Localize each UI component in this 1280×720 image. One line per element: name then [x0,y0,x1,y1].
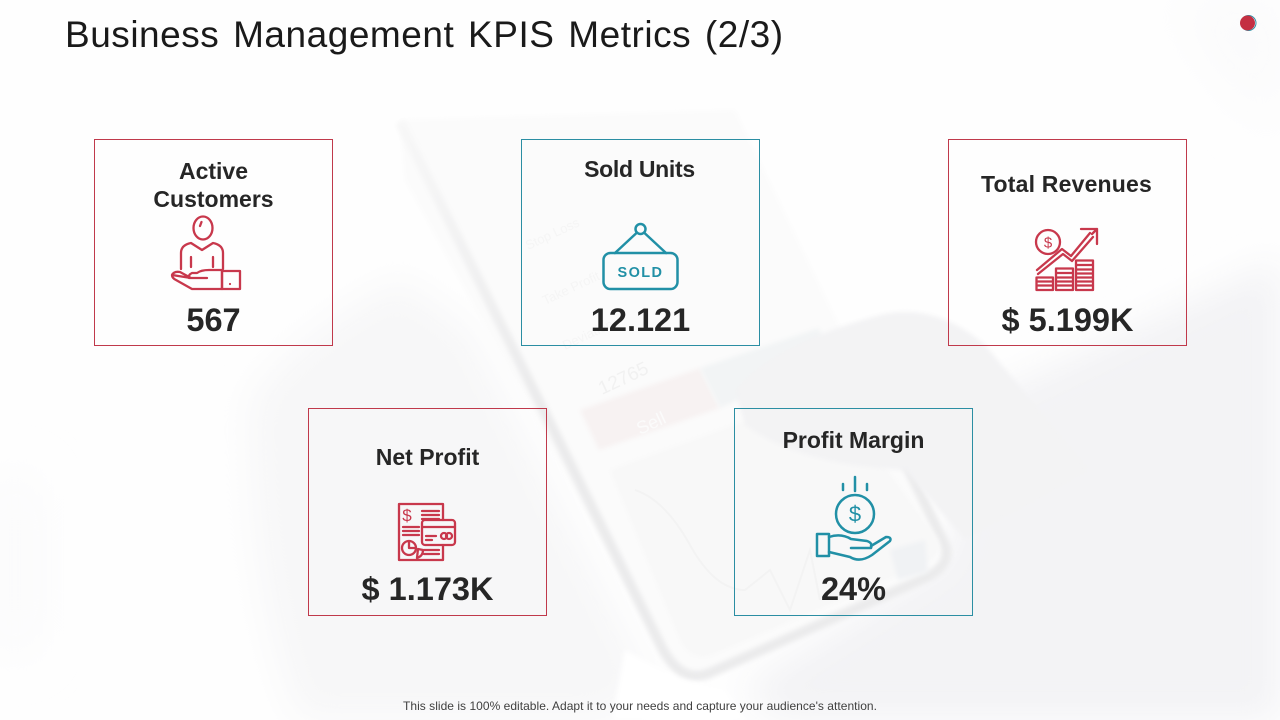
heading: active customers: Active [179,158,248,184]
finger [735,312,1090,540]
panel: active customers [94,139,333,346]
value: 567: 567 [186,302,241,338]
footer note: This slide is 100% editable. Adapt it to your needs and capture your audience's attention. [403,699,877,713]
screen chart line [635,490,820,610]
panel: total revenues [948,139,1187,346]
panel: sold units [521,139,760,346]
icon: hand holding coin [816,476,892,561]
panel: net profit [308,408,547,616]
value: total revenues amount: $ 5.199K [1002,302,1133,338]
sell bar [580,368,720,450]
heading: sold units: Sold Units [584,156,695,182]
icon: sold sign [602,222,679,290]
faint screen text: Take Profit [540,268,602,308]
heading: active customers: Customers [153,186,274,212]
faint screen text: Sell [633,408,669,439]
icon: revenue chart with coin [1034,228,1098,292]
icon: invoice and credit card [398,502,456,562]
left hand [250,280,650,720]
icon: revenue chart with coin: $ [1044,234,1053,252]
icon: hand holding coin: $ [849,502,861,526]
right hand [740,260,1280,720]
icon: sold sign: SOLD [618,265,663,281]
white gap under phone [612,650,745,720]
value: 24%: 24% [821,571,886,607]
faint screen text: Deviation [560,316,615,353]
panel: profit margin [734,408,973,616]
title: Business Management KPIS Metrics (2/3) [65,14,784,55]
value: net profit amount: $ 1.173K [362,571,493,607]
icon: invoice and credit card: $ [402,506,412,525]
phone body [400,110,946,676]
faint screen text: 12765 [595,358,652,400]
icon: person with open hand [170,215,242,290]
heading: active customers [153,158,274,212]
value: 12.121: 12.121 [591,302,690,338]
heading: profit margin: Profit Margin [783,427,924,453]
faint screen text: Stop Loss [523,214,582,253]
heading: total revenues: Total Revenues [981,171,1152,197]
screen lower part [610,390,939,657]
icon: slide marker dot [1240,15,1256,31]
heading: net profit: Net Profit [376,444,479,470]
faint screen text [523,214,669,439]
